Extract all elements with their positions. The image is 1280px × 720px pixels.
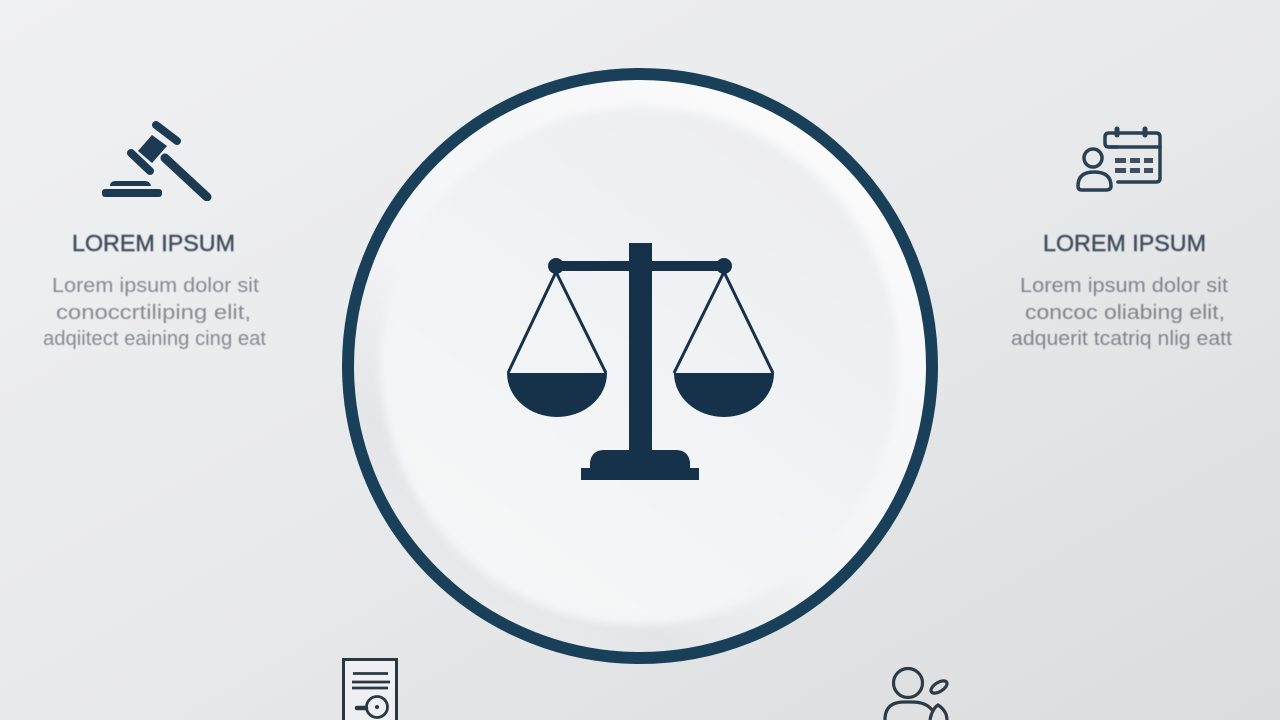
text block: adqiitect eaining cing eat — [43, 328, 266, 350]
text block — [43, 275, 266, 350]
central circle panel — [348, 74, 932, 658]
panel: right item — [1011, 129, 1232, 350]
icon: person with leaves — [885, 668, 949, 720]
icon: gavel — [102, 125, 207, 197]
heading: LOREM IPSUM — [1043, 230, 1206, 256]
text block: Lorem ipsum dolor sit — [1020, 275, 1228, 297]
panel: left item — [43, 125, 266, 350]
text block: conoccrtiliping elit, — [56, 302, 251, 324]
heading: LOREM IPSUM — [72, 230, 235, 256]
icon: balance scale — [507, 243, 774, 480]
text block: adquerit tcatriq nlig eatt — [1011, 328, 1232, 350]
icon: document with seal — [344, 660, 396, 720]
text block: Lorem ipsum dolor sit — [52, 275, 259, 297]
text block — [1011, 275, 1232, 350]
icon: calendar with person — [1078, 129, 1160, 190]
text block: concoc oliabing elit, — [1025, 302, 1225, 324]
